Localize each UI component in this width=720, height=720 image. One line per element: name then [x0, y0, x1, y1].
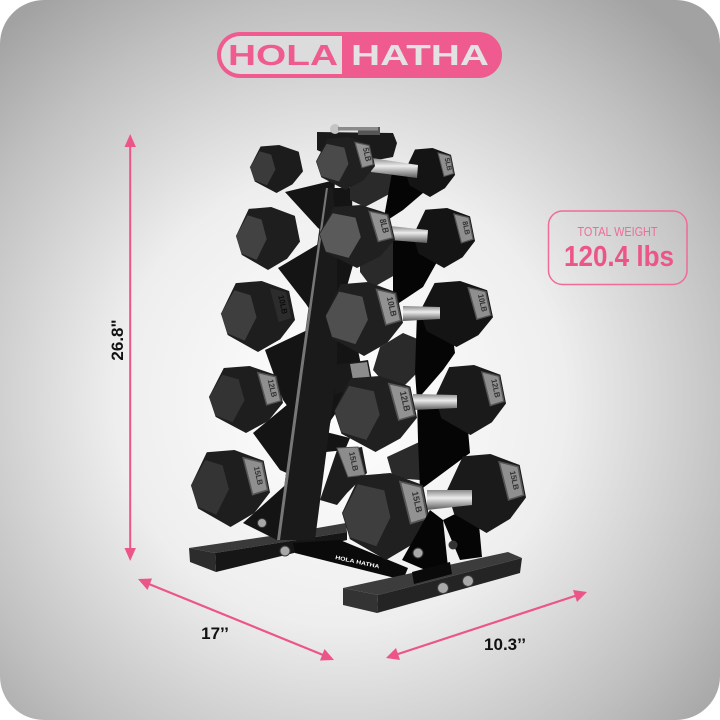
left dumbbell head 8 lb [236, 207, 300, 270]
far dumbbell head 15 lb: 15LB [508, 470, 521, 491]
dimension arrow: height [124, 134, 136, 561]
rack frame: rear arms and spine [243, 180, 362, 540]
dimension arrow: depth [386, 590, 587, 660]
callout: total weight: TOTAL WEIGHT [578, 225, 658, 239]
front dumbbell head 5 lb [316, 137, 375, 190]
rear dumbbell middle 15 lb [320, 447, 367, 505]
far dumbbell head 12 lb [435, 365, 506, 435]
dumbbell rack product [189, 124, 526, 613]
label: depth 10.3: 10.3’’ [484, 635, 526, 654]
front dumbbell head 15 lb [342, 473, 430, 560]
dimension arrow: width [138, 578, 334, 660]
far dumbbell head 15 lb [447, 454, 526, 533]
rack base: front diagonal bar [293, 540, 408, 580]
far dumbbell head 5 lb [405, 148, 455, 197]
rack base: rear foot [189, 523, 347, 572]
rack base: front foot [343, 552, 522, 613]
logo: Hola Hatha: HOLA [228, 40, 338, 72]
left dumbbell head 10 lb [221, 281, 295, 352]
left dumbbell head 12 lb [209, 366, 283, 433]
far dumbbell head 5 lb: 5LB [443, 157, 452, 171]
front dumbbell head 8 lb: 8LB [377, 218, 392, 234]
rack frame: rear dark plates [350, 163, 433, 480]
front dumbbell head 15 lb: 15LB [410, 491, 424, 513]
label: height 26.8: 26.8" [108, 319, 127, 361]
front dumbbell head 10 lb: 10LB [385, 296, 399, 317]
front dumbbell head 10 lb [325, 282, 403, 356]
rack base: front diagonal bar: HOLA HATHA [335, 555, 380, 570]
label: width 17: 17’’ [201, 624, 229, 643]
rear dumbbell middle 15 lb: 15LB [347, 451, 360, 472]
rack frame: center beam [277, 188, 337, 540]
far dumbbell head 12 lb: 12LB [489, 378, 502, 399]
rack frame: top bracket [317, 124, 397, 165]
left dumbbell head 15 lb: 15LB [252, 466, 265, 486]
rear dumbbell middle 12 lb label [335, 360, 372, 395]
front dumbbell head 12 lb: 12LB [398, 390, 413, 412]
callout: total weight [548, 211, 687, 284]
logo: Hola Hatha: HATHA [351, 40, 489, 72]
far dumbbell head 10 lb: 10LB [476, 293, 489, 313]
left dumbbell head 15 lb [191, 450, 270, 527]
left dumbbell head 5 lb [250, 145, 303, 193]
front dumbbell head 12 lb [334, 376, 417, 452]
far dumbbell head 8 lb: 8LB [460, 220, 472, 235]
front dumbbell head 8 lb [319, 205, 395, 268]
bolts [258, 518, 474, 594]
logo: Hola Hatha [217, 32, 502, 78]
left dumbbell head 10 lb: 10LB [276, 294, 289, 315]
callout: total weight: 120.4 lbs [564, 241, 674, 273]
left dumbbell head 12 lb: 12LB [266, 379, 279, 398]
rack frame: front bracket over 15 lb head [402, 510, 448, 572]
rack frame: black brackets [383, 167, 482, 560]
dumbbell handles [371, 158, 472, 510]
front dumbbell head 5 lb: 5LB [361, 147, 373, 163]
far dumbbell head 8 lb [413, 208, 475, 268]
far dumbbell head 10 lb [420, 281, 493, 347]
